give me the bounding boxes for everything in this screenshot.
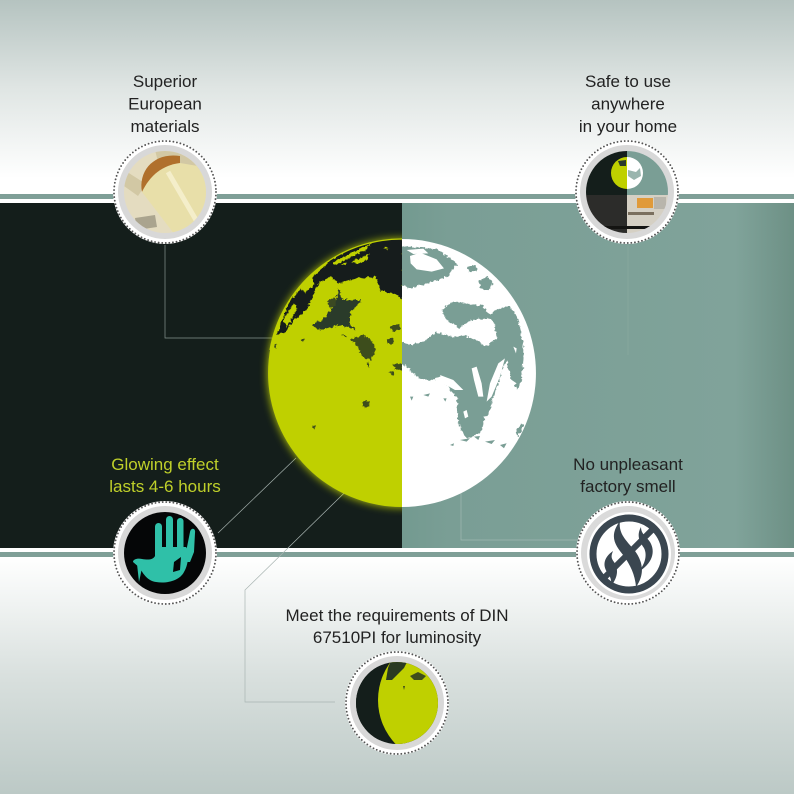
top background xyxy=(0,0,794,194)
heading: superior materials: Superior xyxy=(133,72,197,91)
lit half of moon xyxy=(402,239,536,507)
heading: superior materials: materials xyxy=(131,117,199,136)
badge: glowing hand xyxy=(113,501,217,605)
heading: glowing effect xyxy=(109,455,221,496)
heading: DIN requirements xyxy=(286,606,508,647)
badge: safe at home xyxy=(575,140,679,244)
heading: glowing effect: Glowing effect xyxy=(111,455,219,474)
heading: superior materials xyxy=(128,72,202,136)
moon xyxy=(267,235,537,508)
icon: prohibited smell sign xyxy=(593,518,665,590)
heading: safe to use xyxy=(579,72,677,136)
leader lines xyxy=(165,245,628,702)
moon glow xyxy=(261,232,402,514)
panel: dark left band xyxy=(0,203,402,548)
heading: glowing effect: lasts 4-6 hours xyxy=(109,477,221,496)
bottom stripe xyxy=(0,548,794,557)
badge: luminosity xyxy=(345,651,449,755)
icon: glowing moon detail xyxy=(356,662,438,744)
heading: safe to use: anywhere xyxy=(591,94,665,114)
panel: teal right band xyxy=(402,203,794,548)
icon: moon in living room xyxy=(585,150,669,235)
heading: DIN requirements: Meet the requirements of DIN xyxy=(286,606,508,625)
icon: cream roll xyxy=(124,151,206,233)
maria on lit half xyxy=(398,246,524,448)
heading: no unpleasant smell: No unpleasant xyxy=(573,455,683,474)
heading: superior materials: European xyxy=(128,94,202,114)
heading: no unpleasant smell: factory smell xyxy=(580,477,676,496)
moon rim xyxy=(270,239,402,350)
heading: DIN requirements: 67510PI for luminosity xyxy=(313,628,482,647)
heading: safe to use: in your home xyxy=(579,117,677,136)
badge: no smell xyxy=(576,501,680,605)
heading: safe to use: Safe to use xyxy=(585,72,671,91)
badge: european materials xyxy=(113,140,217,244)
bottom background xyxy=(0,557,794,794)
top stripe xyxy=(0,194,794,203)
heading: no unpleasant smell xyxy=(573,455,683,496)
maria on glowing half xyxy=(273,235,403,429)
glowing half of moon xyxy=(268,239,402,507)
icon: hand print xyxy=(133,516,195,583)
